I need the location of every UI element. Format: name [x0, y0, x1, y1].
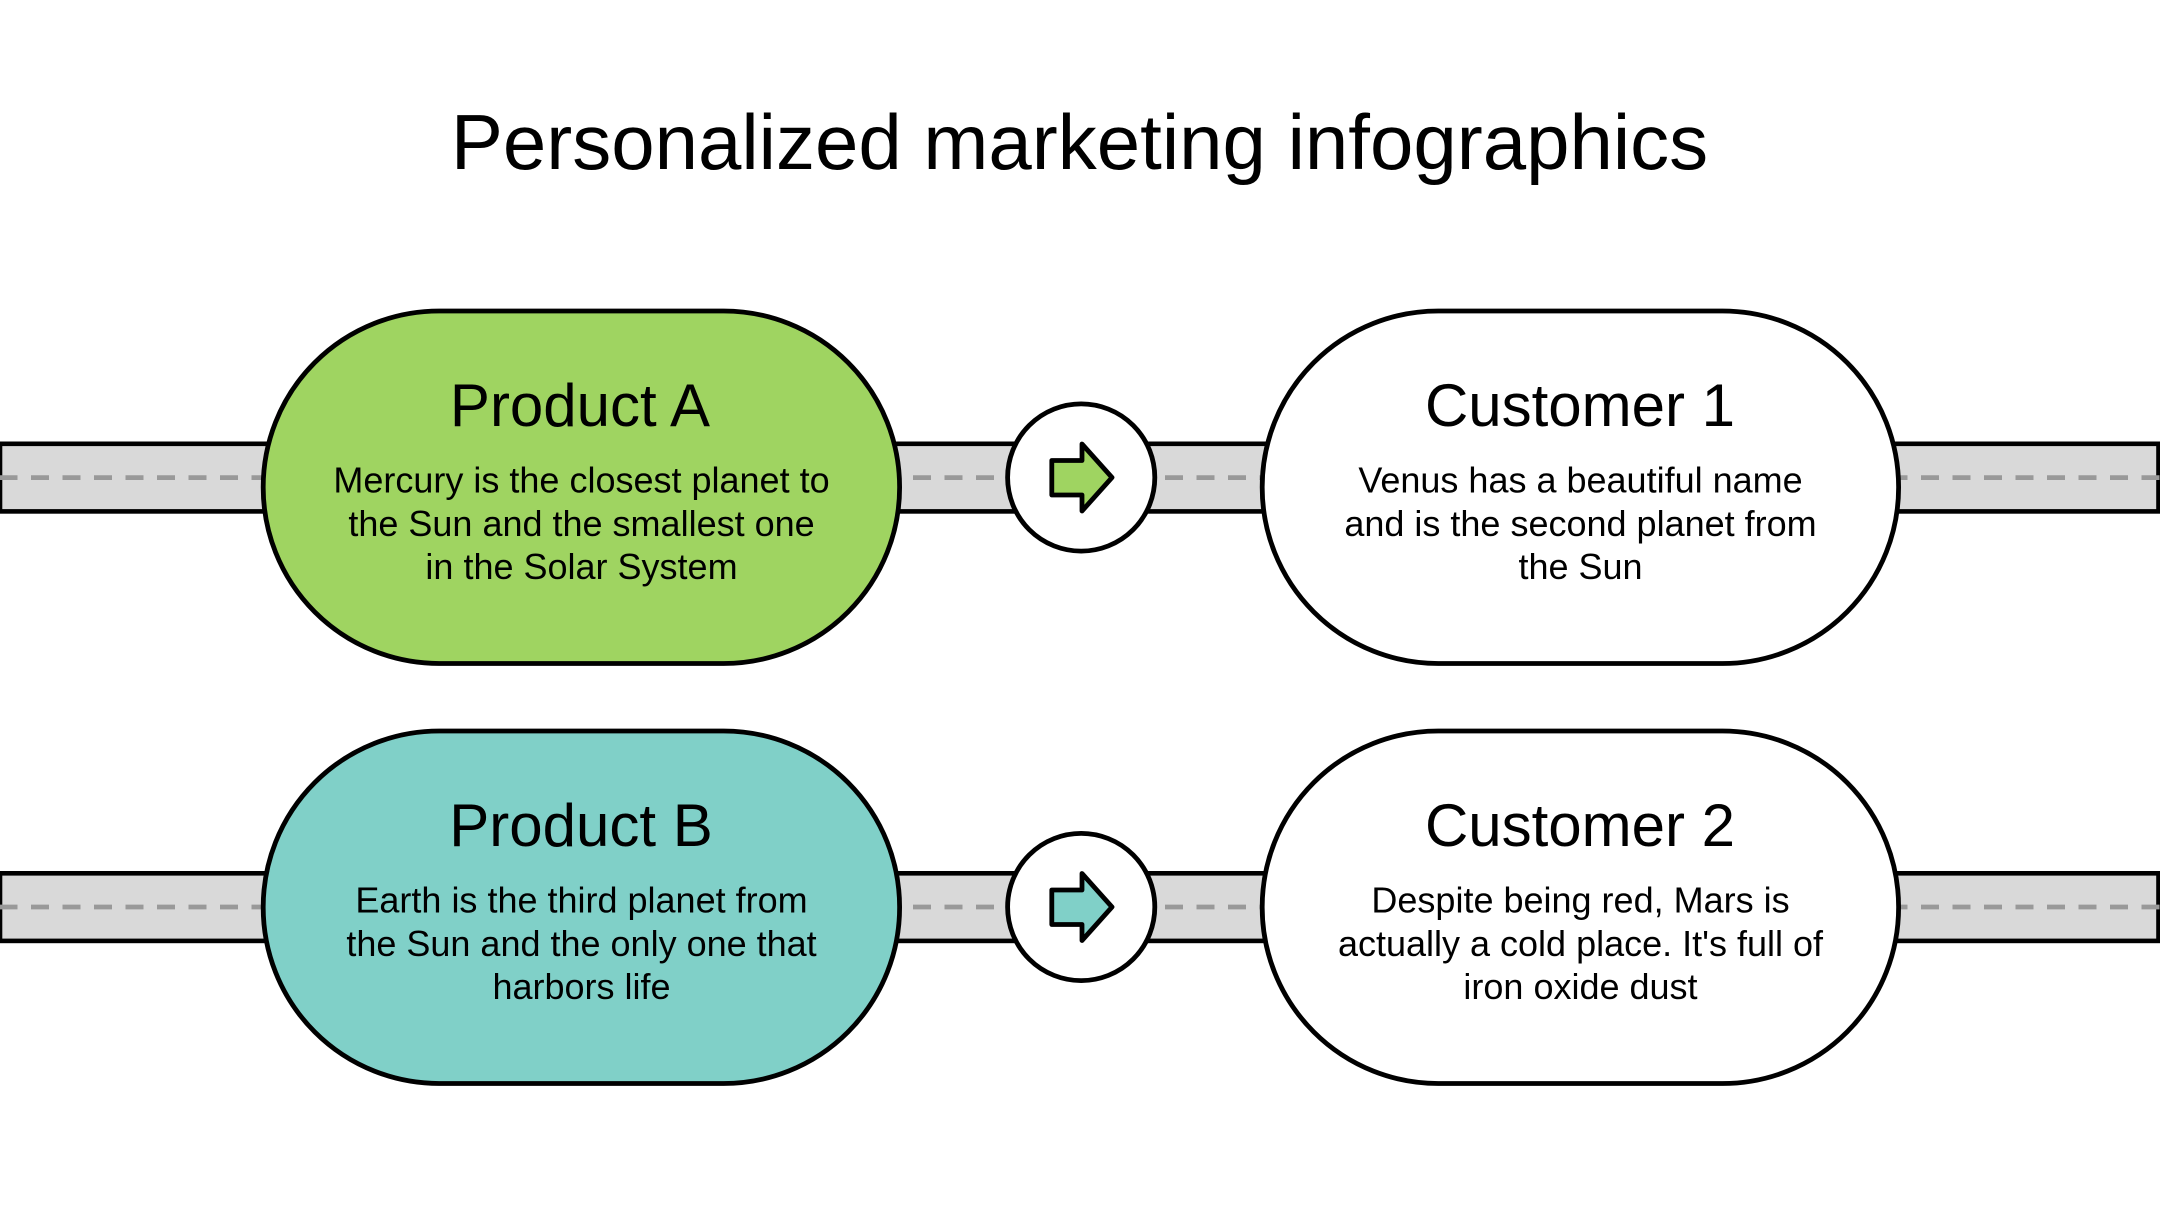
road: row 2	[0, 873, 2160, 941]
text: Customer 1 description: and is the second planet from	[1344, 503, 1817, 544]
text: Customer 2 description: iron oxide dust	[1463, 966, 1698, 1007]
panel: Product A	[263, 311, 900, 664]
title: Personalized marketing infographics	[451, 98, 1708, 186]
text: Customer 2 description: actually a cold place. It's full of	[1338, 923, 1824, 964]
text: Product A description: Mercury is the closest planet to	[333, 460, 830, 500]
heading: Customer 1: Customer 1	[1425, 372, 1735, 439]
text: Product A description: in the Solar System	[425, 546, 738, 587]
icon: arrow in circle, row 1	[1008, 404, 1155, 551]
text: Customer 2 description: Despite being red, Mars is	[1371, 880, 1790, 920]
heading: Product B: Product B	[449, 792, 713, 859]
text: Customer 1 description: Venus has a beautiful name	[1358, 460, 1803, 500]
panel: Customer 2	[1262, 731, 1899, 1084]
panel: Customer 1	[1262, 311, 1899, 664]
panel: Product B	[263, 731, 900, 1084]
heading: Product A: Product A	[450, 372, 710, 439]
text: Customer 1 description: the Sun	[1518, 546, 1643, 587]
text: Product B description: Earth is the third planet from	[355, 880, 808, 920]
text: Product A description: the Sun and the smallest one	[348, 503, 815, 544]
text: Product B description: harbors life	[492, 966, 671, 1007]
road: row 1	[0, 444, 2160, 511]
icon: arrow in circle, row 2	[1008, 833, 1155, 981]
heading: Customer 2: Customer 2	[1425, 792, 1735, 859]
text: Product B description: the Sun and the only one that	[346, 923, 817, 964]
